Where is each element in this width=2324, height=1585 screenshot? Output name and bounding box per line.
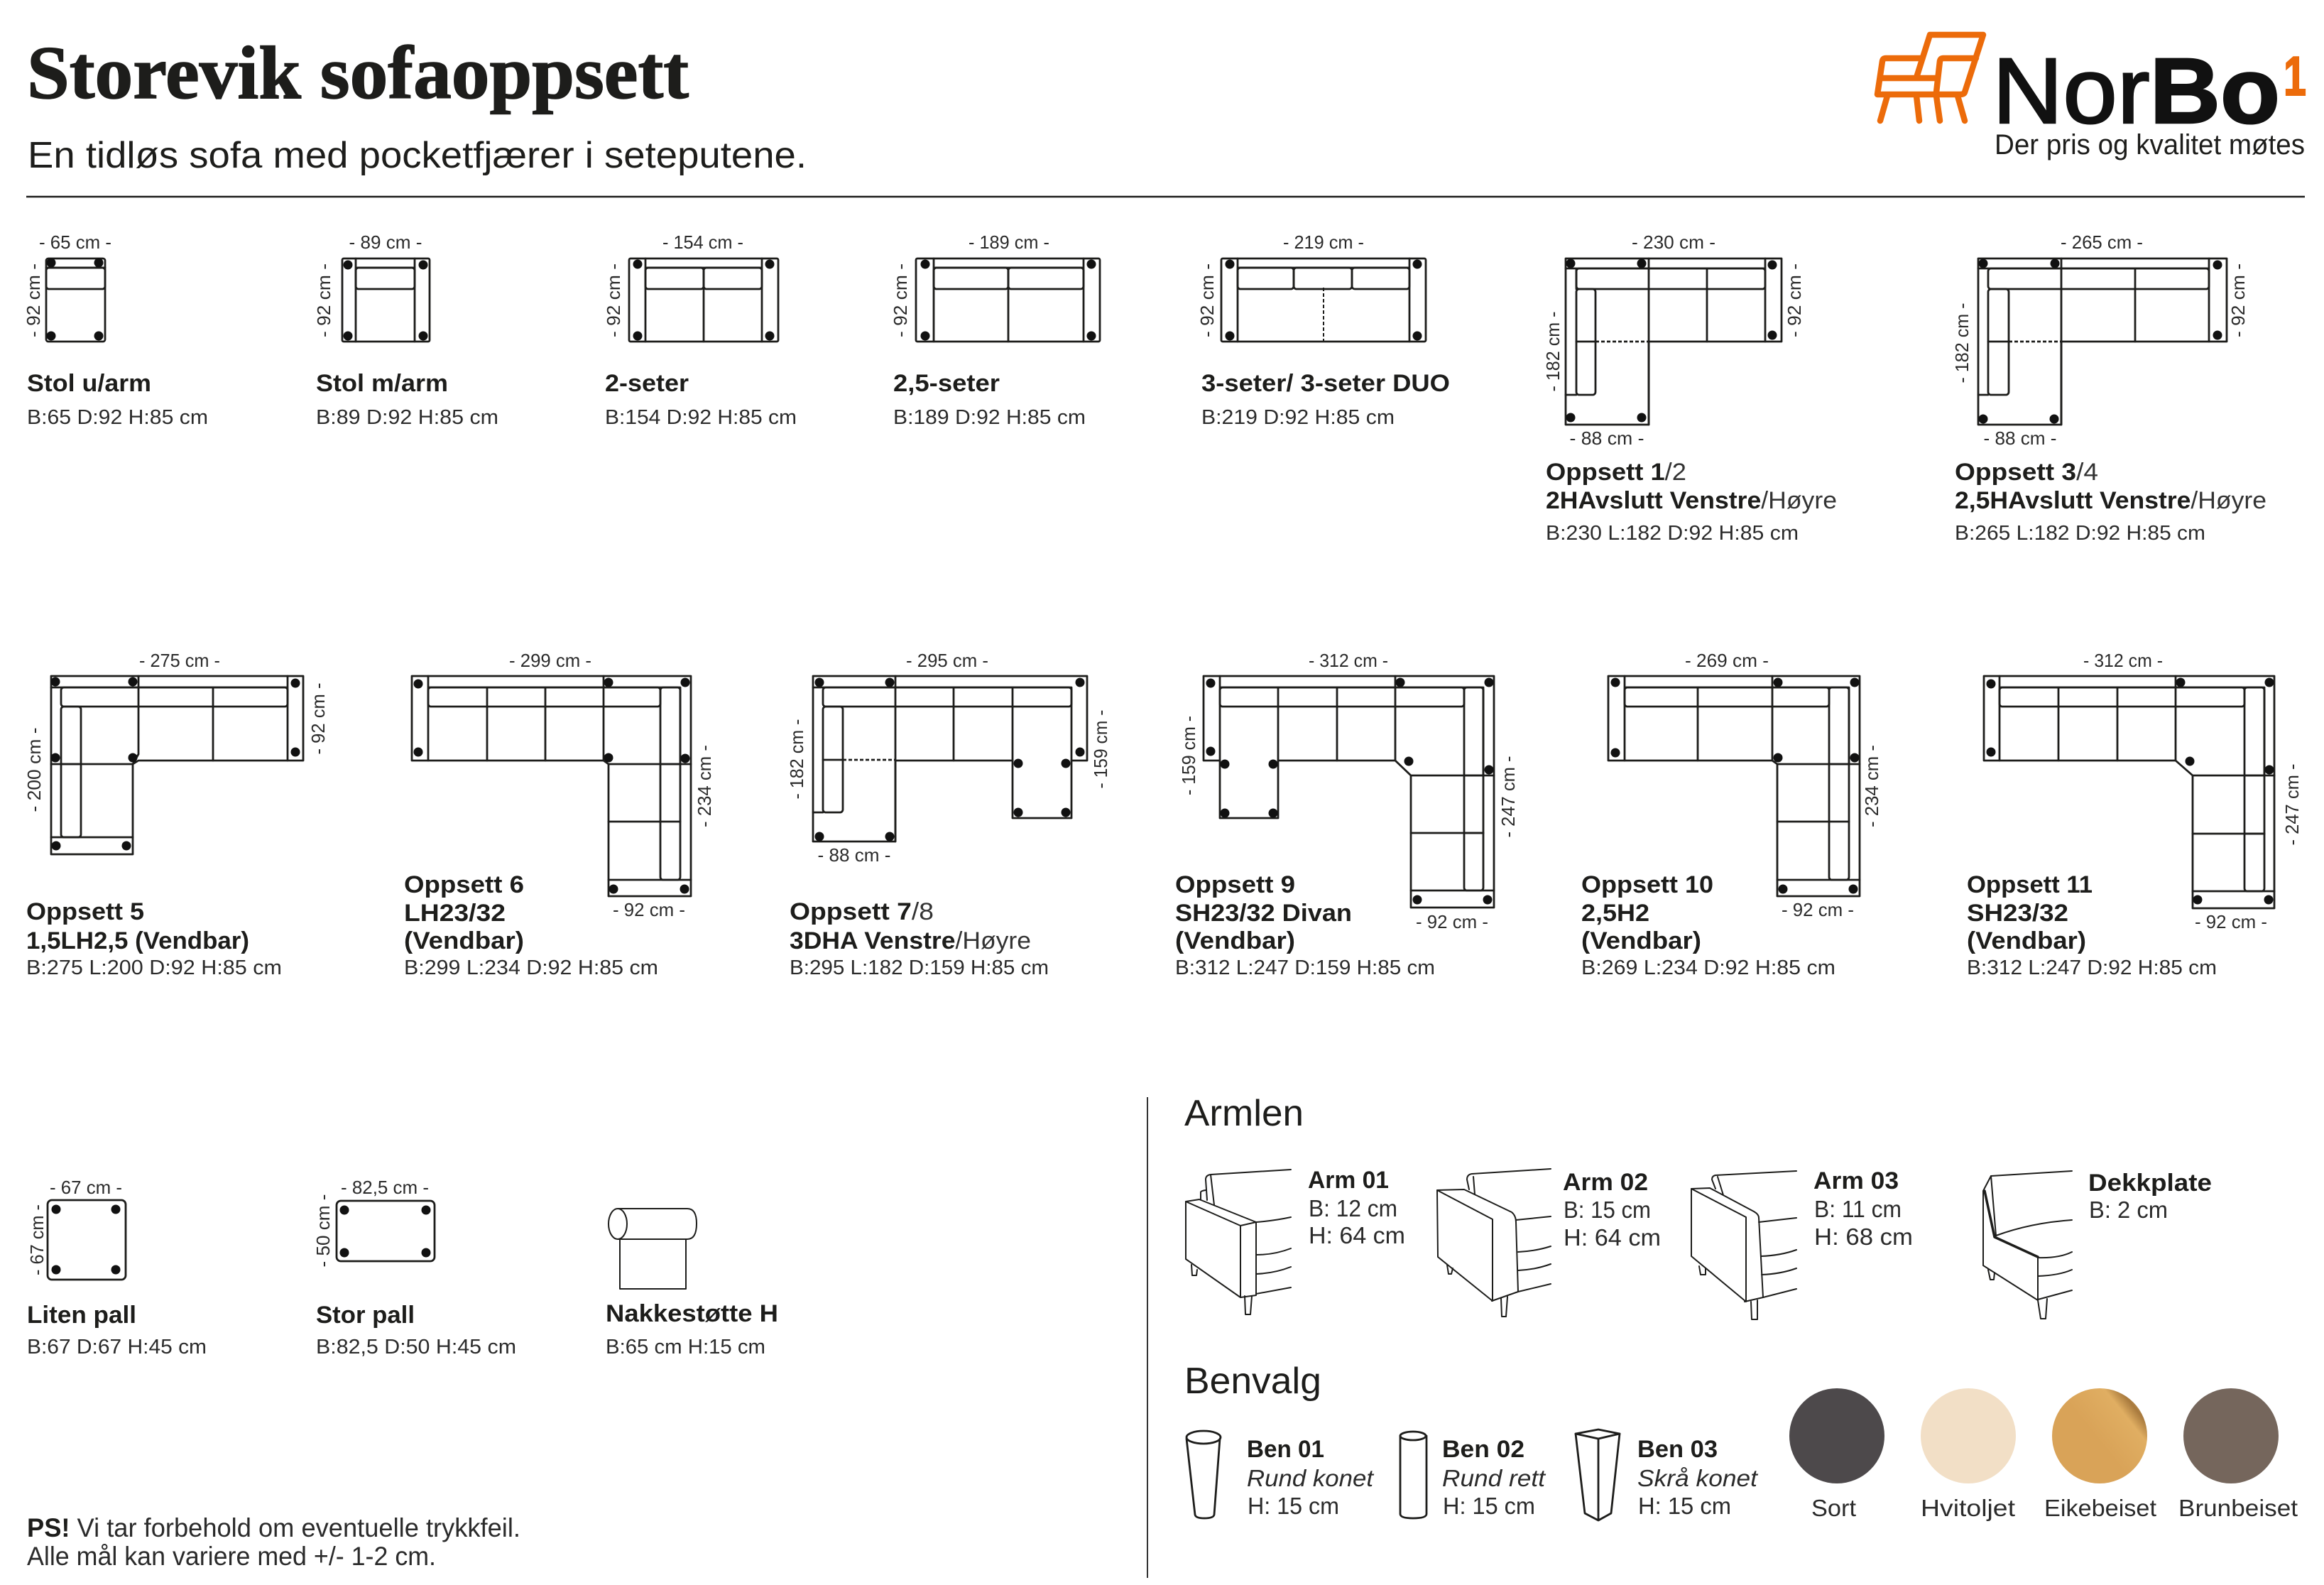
plan diagram <box>1566 258 1782 425</box>
label <box>1201 370 1450 429</box>
label: B:275 L:200 D:92 H:85 cm <box>26 957 282 979</box>
dimensions <box>1196 232 1364 337</box>
label: Stor pall <box>316 1302 415 1329</box>
dimensions: - 234 cm - <box>1861 745 1882 827</box>
plan diagram <box>813 676 1087 841</box>
plan diagram <box>337 1201 435 1261</box>
dimensions: - 65 cm - <box>39 232 111 253</box>
dimensions: - 200 cm - <box>23 727 45 812</box>
option: Dekkplate <box>1983 1170 2212 1319</box>
label: B:299 L:234 D:92 H:85 cm <box>404 957 658 979</box>
label: SH23/32 Divan <box>1175 900 1352 927</box>
module: Liten pall <box>26 1177 207 1358</box>
text: Ben 01 <box>1247 1436 1324 1463</box>
dimensions: - 92 cm - <box>1416 911 1488 932</box>
module: Nakkestøtte H <box>606 1209 778 1358</box>
dimensions: - 265 cm - <box>2061 232 2143 253</box>
label: 1,5LH2,5 (Vendbar) <box>26 927 249 954</box>
dimensions: - 50 cm - <box>312 1194 334 1267</box>
swatch: Eikebeiset: Eikebeiset <box>2044 1495 2156 1521</box>
dimensions <box>786 650 1111 866</box>
icon: leg 01 <box>1186 1431 1221 1518</box>
text: Arm 03 <box>1813 1167 1899 1194</box>
label: B:67 D:67 H:45 cm <box>27 1336 207 1358</box>
plan diagram <box>1221 258 1426 342</box>
text: H: 15 cm <box>1443 1493 1535 1519</box>
label: B:65 cm H:15 cm <box>606 1336 765 1358</box>
text: B: 15 cm <box>1564 1197 1651 1223</box>
label: Stol m/arm <box>316 370 448 397</box>
dimensions: - 295 cm - <box>906 650 988 671</box>
module: Stor pall <box>312 1177 516 1358</box>
label: B:219 D:92 H:85 cm <box>1201 406 1395 429</box>
plan diagram <box>51 676 303 854</box>
note: PS disclaimer: PS! Vi tar forbehold om eventuelle trykkfeil. <box>27 1513 520 1542</box>
dimensions: - 92 cm - <box>1196 263 1218 337</box>
label: SH23/32 <box>1967 900 2068 927</box>
dimensions <box>23 650 329 812</box>
label: B:154 D:92 H:85 cm <box>605 406 797 429</box>
tagline: Der pris og kvalitet møtes <box>1995 129 2305 160</box>
dimensions: - 92 cm - <box>2195 911 2267 932</box>
icon: arm 01 <box>1186 1170 1291 1314</box>
swatch: Brunbeiset <box>2178 1388 2298 1521</box>
swatch: Brunbeiset: Brunbeiset <box>2178 1495 2298 1521</box>
dimensions: - 312 cm - <box>1309 650 1388 671</box>
heading: Armlen <box>1184 1093 1304 1134</box>
label <box>316 370 498 429</box>
plan diagram <box>46 258 105 342</box>
icon: cover plate <box>1983 1171 2072 1319</box>
dimensions: - 89 cm - <box>349 232 422 253</box>
label: B:230 L:182 D:92 H:85 cm <box>1546 522 1799 545</box>
plan diagram <box>916 258 1100 342</box>
module: 2-seter <box>603 232 797 429</box>
label: LH23/32 <box>404 900 506 927</box>
dimensions <box>603 232 743 337</box>
dimensions: - 88 cm - <box>1569 427 1644 449</box>
swatch: Eikebeiset <box>2044 1388 2156 1521</box>
option: Arm 03 <box>1691 1167 1913 1319</box>
label: Oppsett 10 <box>1581 871 1713 898</box>
dimensions <box>1685 650 1882 920</box>
label: Oppsett 7 /8 <box>790 898 934 925</box>
label <box>893 370 1086 429</box>
icon: leg 02 <box>1400 1432 1426 1518</box>
option: Arm 01 <box>1186 1167 1405 1314</box>
text: Rund konet <box>1247 1465 1375 1491</box>
heading: Benvalg <box>1184 1361 1321 1402</box>
label: B:269 L:234 D:92 H:85 cm <box>1581 957 1835 979</box>
dimensions: - 92 cm - <box>1784 263 1805 337</box>
plan diagram <box>1204 676 1494 908</box>
label: (Vendbar) <box>1967 927 2086 954</box>
plan diagram <box>1984 676 2274 908</box>
module: Oppsett 3/4 <box>1951 232 2266 545</box>
plan diagram <box>1978 258 2227 425</box>
dimensions: - 92 cm - <box>1782 899 1854 920</box>
label: 2,5-seter <box>893 370 1000 397</box>
note: PS disclaimer: Alle mål kan variere med +/- 1-2 cm. <box>27 1542 436 1571</box>
dimensions <box>890 232 1049 337</box>
label <box>1967 871 2217 979</box>
title: Storevik sofaoppsett <box>27 31 689 114</box>
dimensions: - 92 cm - <box>2227 263 2249 337</box>
label: Oppsett 1 /2 <box>1546 459 1686 486</box>
dimensions: - 159 cm - <box>1178 716 1199 795</box>
dimensions: - 154 cm - <box>662 232 743 253</box>
label: B:89 D:92 H:85 cm <box>316 406 498 429</box>
panel: Armlen <box>1184 1093 2212 1319</box>
text: H: 15 cm <box>1248 1493 1339 1519</box>
dimensions: - 67 cm - <box>26 1204 48 1275</box>
dimensions: - 299 cm - <box>509 650 591 671</box>
label: Oppsett 11 <box>1967 871 2093 898</box>
label: (Vendbar) <box>1175 927 1295 954</box>
label: 2,5H2 <box>1581 900 1649 927</box>
dimensions: - 189 cm - <box>969 232 1049 253</box>
dimensions: - 82,5 cm - <box>341 1177 429 1198</box>
text <box>1637 1436 1759 1519</box>
label: B:65 D:92 H:85 cm <box>27 406 208 429</box>
text <box>1563 1169 1661 1251</box>
label: Nakkestøtte H <box>606 1300 778 1327</box>
module: Stol u/arm <box>23 232 208 429</box>
label <box>606 1300 778 1358</box>
label <box>790 898 1049 979</box>
text: Skrå konet <box>1637 1465 1759 1491</box>
label <box>1581 871 1835 979</box>
label <box>605 370 797 429</box>
label <box>1175 871 1435 979</box>
label: Oppsett 5 <box>26 898 144 925</box>
dimensions: - 234 cm - <box>694 745 715 827</box>
module: 3-seter / 3-seter DUO <box>1196 232 1450 429</box>
module: Oppsett 7/8 <box>786 650 1111 979</box>
dimensions: - 88 cm - <box>1984 427 2056 449</box>
dimensions: - 92 cm - <box>307 683 329 754</box>
text: B: 11 cm <box>1814 1196 1902 1222</box>
label: Liten pall <box>27 1302 136 1329</box>
dimensions: - 92 cm - <box>890 263 911 337</box>
label: Oppsett 9 <box>1175 871 1295 898</box>
dimensions <box>313 232 422 337</box>
icon: orange chair <box>1877 35 1983 121</box>
module: Oppsett 1/2 <box>1542 232 1837 545</box>
option: Ben 02 <box>1400 1432 1546 1519</box>
icon: neck rest <box>609 1209 697 1289</box>
label <box>404 871 658 979</box>
dimensions: - 92 cm - <box>603 263 624 337</box>
label: B:82,5 D:50 H:45 cm <box>316 1336 516 1358</box>
dimensions: - 67 cm - <box>50 1177 122 1198</box>
logo: NorBo <box>1877 35 2306 160</box>
swatch: Hvitoljet <box>1921 1388 2016 1521</box>
label <box>27 1302 207 1358</box>
text: Ben 03 <box>1637 1436 1718 1463</box>
subtitle: En tidløs sofa med pocketfjærer i seteputene. <box>28 135 807 176</box>
dimensions: - 247 cm - <box>1497 756 1519 838</box>
text: H: 64 cm <box>1564 1224 1661 1251</box>
dimensions <box>23 232 111 337</box>
swatch: Hvitoljet: Hvitoljet <box>1921 1495 2015 1521</box>
dimensions: - 219 cm - <box>1283 232 1364 253</box>
label: Oppsett 6 <box>404 871 524 898</box>
dimensions: - 275 cm - <box>139 650 220 671</box>
text <box>1442 1436 1546 1519</box>
text <box>1813 1167 1913 1250</box>
text: B: 2 cm <box>2089 1197 2168 1223</box>
superscript 1: 1 <box>2284 45 2306 107</box>
label: 3DHA Venstre /Høyre <box>790 927 1031 954</box>
dimensions <box>1178 650 1519 932</box>
dimensions <box>26 1177 122 1275</box>
plan diagram <box>412 676 691 896</box>
module: 2,5-seter <box>890 232 1100 429</box>
text: Rund rett <box>1442 1465 1546 1491</box>
plan diagram <box>629 258 778 342</box>
dimensions: - 182 cm - <box>1951 303 1973 383</box>
module: Oppsett 6 <box>404 650 715 979</box>
dimensions: - 182 cm - <box>786 719 807 800</box>
dimensions: - 182 cm - <box>1542 311 1564 392</box>
icon: arm 03 <box>1691 1171 1796 1319</box>
label: Oppsett 3 /4 <box>1955 459 2098 486</box>
label: (Vendbar) <box>1581 927 1701 954</box>
plan diagram <box>342 258 430 342</box>
label <box>26 898 282 979</box>
dimensions: - 247 cm - <box>2281 764 2303 845</box>
label: 2,5HAvslutt Venstre /Høyre <box>1955 487 2266 514</box>
dimensions: - 92 cm - <box>313 263 334 337</box>
label <box>1546 459 1837 545</box>
text: Dekkplate <box>2088 1170 2212 1197</box>
module: Oppsett 10 <box>1581 650 1882 979</box>
label: B:295 L:182 D:159 H:85 cm <box>790 957 1049 979</box>
option: Arm 02 <box>1437 1169 1661 1317</box>
label <box>27 370 208 429</box>
swatch: Sort: Sort <box>1811 1495 1856 1521</box>
dimensions: - 312 cm - <box>2083 650 2163 671</box>
dimensions <box>509 650 715 920</box>
swatch: Sort <box>1789 1388 1884 1521</box>
label <box>316 1302 516 1358</box>
text <box>1247 1436 1375 1519</box>
label: 2-seter <box>605 370 689 397</box>
dimensions: - 269 cm - <box>1685 650 1769 671</box>
text: Arm 02 <box>1563 1169 1648 1196</box>
dimensions <box>2083 650 2303 932</box>
module: Oppsett 5 <box>23 650 329 979</box>
dimensions: - 230 cm - <box>1632 232 1715 253</box>
text: Arm 01 <box>1308 1167 1389 1194</box>
text: H: 68 cm <box>1814 1224 1913 1250</box>
label: (Vendbar) <box>404 927 524 954</box>
text <box>1308 1167 1405 1248</box>
dimensions: - 92 cm - <box>613 899 685 920</box>
option: Ben 01 <box>1186 1431 1375 1519</box>
option: Ben 03 <box>1576 1429 1759 1520</box>
label: B:265 L:182 D:92 H:85 cm <box>1955 522 2205 545</box>
label: Stol u/arm <box>27 370 151 397</box>
label: B:312 L:247 D:159 H:85 cm <box>1175 957 1435 979</box>
icon: arm 02 <box>1437 1169 1551 1317</box>
dimensions <box>1542 232 1805 449</box>
module: Oppsett 9 <box>1175 650 1519 979</box>
dimensions <box>312 1177 429 1267</box>
module: Stol m/arm <box>313 232 498 429</box>
plan diagram <box>48 1200 126 1280</box>
dimensions: - 88 cm - <box>818 844 890 866</box>
icon: leg 03 <box>1576 1429 1620 1520</box>
plan diagram <box>1608 676 1860 896</box>
dimensions <box>1951 232 2249 449</box>
label <box>1955 459 2266 545</box>
note: PS disclaimer <box>27 1513 520 1571</box>
text: H: 15 cm <box>1638 1493 1731 1519</box>
label: 3-seter/ 3-seter DUO <box>1201 370 1450 397</box>
label: B:312 L:247 D:92 H:85 cm <box>1967 957 2217 979</box>
wordmark: NorBo <box>1992 38 2280 143</box>
module: Oppsett 11 <box>1967 650 2303 979</box>
text: H: 64 cm <box>1309 1222 1405 1248</box>
dimensions: - 92 cm - <box>23 263 44 337</box>
label: B:189 D:92 H:85 cm <box>893 406 1086 429</box>
dimensions: - 159 cm - <box>1090 710 1111 788</box>
text: Ben 02 <box>1442 1436 1524 1463</box>
text <box>2088 1170 2212 1223</box>
label: 2HAvslutt Venstre /Høyre <box>1546 487 1837 514</box>
panel: Benvalg <box>1184 1361 2298 1521</box>
text: B: 12 cm <box>1309 1195 1397 1221</box>
